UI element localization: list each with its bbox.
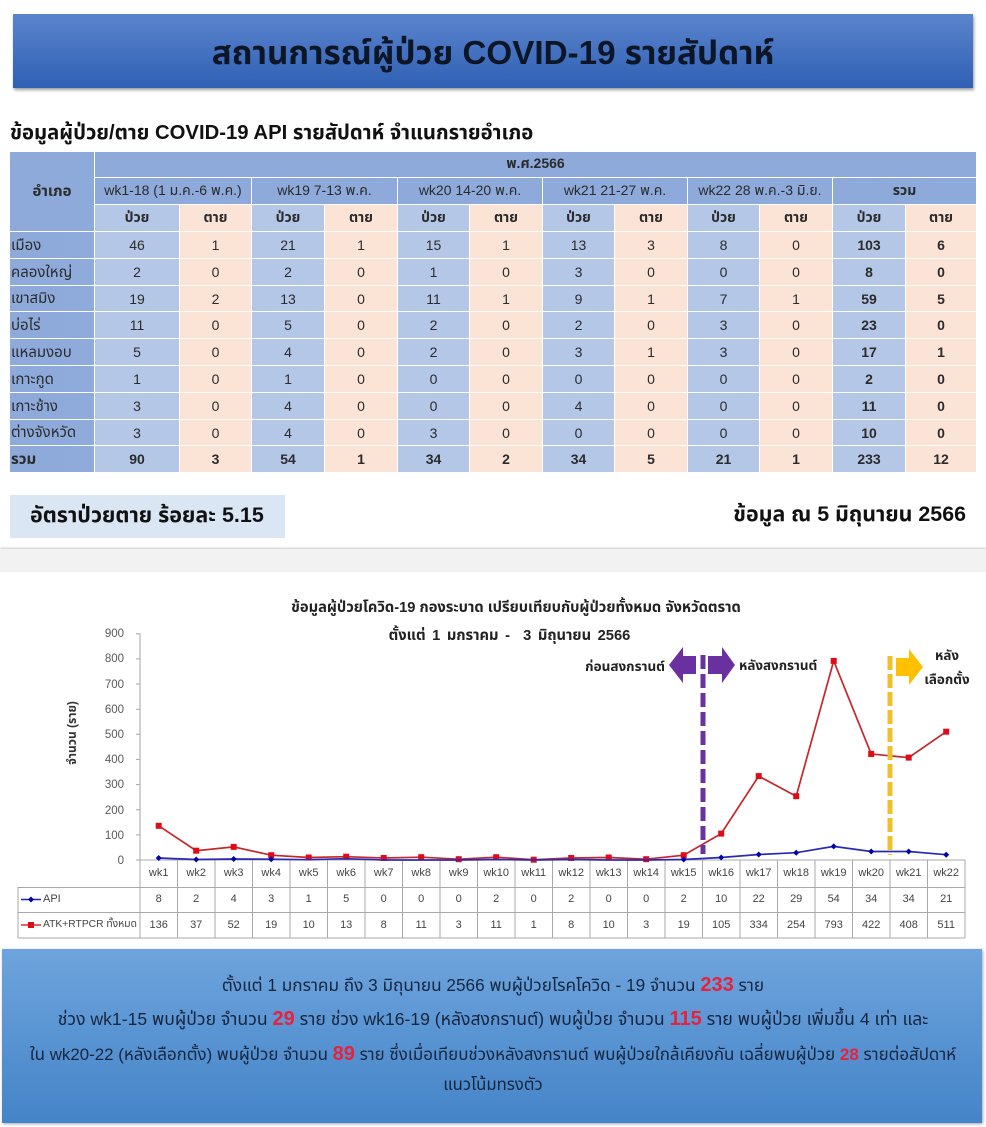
row: Bo Rai: 0 [212, 317, 219, 333]
ATK+RTPCR values row: 3 [456, 919, 462, 931]
row: other provinces: 0 [720, 424, 727, 440]
title banner: สถานการณ์ผู้ป่วย COVID-19 รายสัปดาห์ [212, 35, 774, 72]
API values row: 0 [456, 893, 462, 905]
arrow: after election [896, 649, 923, 685]
row: Khlong Yai: 0 [212, 264, 219, 280]
label: after election [924, 648, 970, 687]
row: Mueang: 21 [280, 237, 296, 253]
label: after election: เลือกตั้ง [924, 670, 970, 687]
API values row: 8 [156, 893, 162, 905]
row: Laem Ngop: 3 [575, 344, 582, 360]
API values row: 0 [381, 893, 387, 905]
chart title [291, 597, 741, 644]
API values row: 2 [493, 893, 499, 905]
y axis: 400 [105, 754, 124, 766]
row: total [10, 446, 976, 472]
row: total: 34 [426, 451, 441, 467]
API values row: 0 [606, 893, 612, 905]
API values row: 10 [715, 893, 727, 905]
blue line: API [156, 843, 949, 862]
row: other provinces: 0 [502, 424, 510, 440]
table header: weeks: wk21 21-27 พ.ค. [564, 182, 666, 198]
row: Khao Saming: 0 [357, 290, 365, 306]
row: Laem Ngop: 2 [430, 344, 437, 360]
row: Khao Saming: 13 [280, 290, 296, 306]
row: Laem Ngop: 0 [357, 344, 365, 360]
row: Ko Chang: 0 [212, 398, 219, 414]
week labels: wk1 [148, 867, 168, 879]
summary line 1: ตั้งแต่ 1 มกราคม ถึง 3 มิถุนายน 2566 พบผู้ป่วยโรคโควิด - 19 จำนวน 233 ราย [222, 974, 764, 996]
row: Mueang: 1 [212, 237, 219, 253]
chart title: ตั้งแต่ 1 มกราคม - 3 มิถุนายน 2566 [389, 625, 630, 644]
week labels: wk2 [185, 867, 206, 879]
ATK+RTPCR values row: 11 [490, 919, 502, 931]
y axis: 0 [118, 855, 124, 867]
API values row: 0 [531, 893, 537, 905]
table header: weeks: wk20 14-20 พ.ค. [419, 182, 521, 198]
table header: sick and dead [95, 205, 976, 231]
row: other provinces: ต่างจังหวัด [11, 424, 76, 441]
row: Ko Chang: 0 [792, 398, 800, 414]
week labels: wk20 [857, 867, 884, 879]
API values row: 29 [790, 893, 802, 905]
week labels [148, 867, 959, 879]
API values row: 2 [193, 893, 199, 905]
week labels: wk17 [745, 867, 772, 879]
y axis: 100 [105, 830, 124, 842]
row: Ko Kut: 0 [720, 371, 727, 387]
row: Mueang: เมือง [11, 236, 41, 254]
row: Ko Kut: 0 [430, 371, 437, 387]
row: total: 5 [647, 451, 655, 467]
week labels: wk9 [448, 867, 468, 879]
week labels: wk18 [782, 867, 809, 879]
ATK+RTPCR values row: 334 [750, 919, 768, 931]
row: Khlong Yai: คลองใหญ่ [11, 264, 72, 280]
title banner [13, 14, 973, 88]
callout: case fatality rate [10, 495, 285, 538]
row: other provinces: 3 [430, 424, 437, 440]
arrow: after Songkran [708, 647, 735, 683]
data date note: ข้อมูล ณ 5 มิถุนายน 2566 [733, 502, 966, 526]
y axis title: จำนวน (ราย) [65, 701, 79, 765]
ATK+RTPCR values row: 13 [340, 919, 352, 931]
y axis: 200 [105, 805, 124, 817]
row: Khlong Yai: 0 [792, 264, 800, 280]
legend: API [21, 893, 61, 905]
row: Khao Saming: 59 [861, 290, 877, 306]
row: Khlong Yai: 0 [937, 264, 945, 280]
y axis: 600 [105, 704, 124, 716]
panel: summary [2, 949, 982, 1123]
week labels: wk6 [335, 867, 356, 879]
row: Bo Rai: 23 [861, 317, 877, 333]
table header: sick and dead: ตาย [929, 208, 953, 224]
purple dashed line: Songkran [700, 655, 706, 854]
row: Bo Rai: 5 [284, 317, 292, 333]
row: Khao Saming [10, 286, 976, 311]
ATK+RTPCR values row: 408 [900, 919, 918, 931]
table header: sick and dead: ป่วย [125, 208, 149, 224]
y axis: 300 [105, 779, 124, 791]
row: Khao Saming: 1 [502, 290, 510, 306]
API values row: 34 [865, 893, 877, 905]
row: Ko Chang: 0 [502, 398, 510, 414]
row: Khao Saming: 1 [647, 290, 655, 306]
row: total: 21 [716, 451, 731, 467]
callout: case fatality rate: อัตราป่วยตาย ร้อยละ 5.15 [30, 503, 264, 527]
row: other provinces: 0 [647, 424, 655, 440]
row: Ko Chang: 0 [647, 398, 655, 414]
API values row: 1 [306, 893, 312, 905]
row: Laem Ngop: 0 [502, 344, 510, 360]
week labels: wk21 [895, 867, 922, 879]
ATK+RTPCR values row: 793 [825, 919, 843, 931]
row: total: 12 [933, 451, 949, 467]
row: Ko Chang: 11 [862, 398, 876, 414]
row: Ko Kut: 0 [357, 371, 365, 387]
row: Bo Rai: 0 [357, 317, 365, 333]
week labels: wk7 [373, 867, 393, 879]
y axis [105, 628, 140, 867]
row: Mueang: 0 [792, 237, 800, 253]
row: other provinces: 0 [792, 424, 800, 440]
row: Ko Chang: 3 [133, 398, 141, 414]
row: other provinces: 0 [575, 424, 582, 440]
table header: weeks: wk22 28 พ.ค.-3 มิ.ย. [698, 182, 822, 198]
row: Laem Ngop [10, 339, 976, 365]
row: Khao Saming: 9 [575, 290, 582, 306]
ATK+RTPCR values row: 8 [568, 919, 574, 931]
row: Mueang: 3 [647, 237, 655, 253]
row: Khlong Yai: 1 [430, 264, 437, 280]
week labels: wk19 [820, 867, 847, 879]
row: Ko Kut: 1 [284, 371, 292, 387]
row: Khao Saming: เขาสมิง [11, 290, 55, 307]
row: Bo Rai: 0 [937, 317, 945, 333]
row: Khlong Yai [10, 259, 976, 285]
week labels: wk5 [298, 867, 318, 879]
row: Ko Kut: 0 [647, 371, 655, 387]
table header: weeks: wk19 7-13 พ.ค. [277, 182, 372, 198]
API values row: 22 [753, 893, 765, 905]
yellow dashed line: election [888, 656, 892, 855]
row: Laem Ngop: 4 [284, 344, 292, 360]
row: Bo Rai: 11 [130, 317, 144, 333]
legend: ATK+RTPCR [21, 917, 137, 930]
row: Ko Kut: เกาะกูด [11, 370, 54, 388]
row: Bo Rai: 2 [575, 317, 582, 333]
row: Mueang: 1 [502, 237, 510, 253]
API values row: 5 [343, 893, 349, 905]
row: total: 90 [129, 451, 145, 467]
row: Ko Chang: 4 [284, 398, 292, 414]
row: Ko Kut: 0 [212, 371, 219, 387]
data table grid [18, 860, 965, 938]
row: Ko Chang: 0 [357, 398, 365, 414]
row: Khlong Yai: 0 [357, 264, 365, 280]
row: Khlong Yai: 0 [502, 264, 510, 280]
row: Khao Saming: 19 [129, 290, 145, 306]
row: Ko Kut: 0 [792, 371, 800, 387]
ATK+RTPCR values row [150, 919, 955, 931]
week labels: wk14 [632, 867, 659, 879]
row: Mueang [10, 232, 976, 258]
row: Bo Rai [10, 312, 976, 338]
row: Laem Ngop: 0 [792, 344, 800, 360]
red line: ATK+RTPCR total [156, 658, 949, 863]
API values row: 54 [828, 893, 840, 905]
table header: sick and dead: ป่วย [711, 208, 736, 224]
API values row: 0 [643, 893, 649, 905]
week labels: wk8 [410, 867, 431, 879]
table header: sick and dead: ป่วย [421, 208, 446, 224]
ATK+RTPCR values row: 37 [190, 919, 202, 931]
row: total: 1 [792, 451, 800, 467]
row: Khlong Yai: 3 [575, 264, 582, 280]
row: Khao Saming: 11 [426, 290, 441, 306]
row: Laem Ngop: แหลมงอบ [11, 344, 72, 360]
week labels: wk15 [670, 867, 697, 879]
ATK+RTPCR values row: 511 [937, 919, 955, 931]
table header: weeks [95, 178, 976, 204]
y axis: 800 [105, 653, 124, 665]
table header: weeks: wk1-18 (1 ม.ค.-6 พ.ค.) [104, 182, 242, 198]
API values row: 3 [268, 893, 274, 905]
summary line 2: ช่วง wk1-15 พบผู้ป่วย จำนวน 29 ราย ช่วง wk16-19 (หลังสงกรานต์) พบผู้ป่วย จำนวน 115 ราย พบผู้ป่วย เพิ่มขึ้น 4 เท่า และ [58, 1008, 928, 1030]
table header: sick and dead: ตาย [204, 208, 227, 224]
legend: API: API [43, 893, 61, 905]
row: Laem Ngop: 5 [133, 344, 141, 360]
row: Ko Chang: เกาะช้าง [11, 398, 58, 414]
row: total: 3 [212, 451, 219, 467]
row: Mueang: 15 [426, 237, 441, 253]
API values row [156, 893, 952, 905]
week labels: wk3 [223, 867, 243, 879]
ATK+RTPCR values row: 19 [265, 919, 277, 931]
row: Mueang: 46 [129, 237, 145, 253]
API values row: 2 [568, 893, 574, 905]
row: Ko Kut: 1 [133, 371, 141, 387]
arrow: before Songkran [669, 647, 696, 683]
row: Laem Ngop: 1 [647, 344, 655, 360]
week labels: wk12 [557, 867, 584, 879]
API values row: 4 [231, 893, 237, 905]
table header: sick and dead: ตาย [494, 208, 518, 224]
row: Ko Kut [10, 366, 976, 392]
table header: weeks: รวม [893, 182, 916, 198]
row: Mueang: 8 [720, 237, 727, 253]
week labels: wk4 [260, 867, 281, 879]
row: other provinces: 3 [133, 424, 141, 440]
row: other provinces: 0 [212, 424, 219, 440]
table header: sick and dead: ป่วย [566, 208, 591, 224]
table header: sick and dead: ป่วย [857, 208, 881, 224]
row: Ko Chang: 0 [937, 398, 945, 414]
ATK+RTPCR values row: 52 [228, 919, 240, 931]
row: Ko Kut: 0 [502, 371, 510, 387]
row: total: 34 [571, 451, 586, 467]
row: Ko Kut: 0 [575, 371, 582, 387]
row: Bo Rai: 2 [430, 317, 437, 333]
ATK+RTPCR values row: 3 [643, 919, 649, 931]
row: total: รวม [11, 450, 36, 468]
week labels: wk10 [482, 867, 509, 879]
table: weekly cases and deaths by district [10, 152, 976, 472]
ATK+RTPCR values row: 136 [150, 919, 168, 931]
row: Khlong Yai: 8 [865, 264, 873, 280]
ATK+RTPCR values row: 11 [415, 919, 427, 931]
row: Khlong Yai: 2 [133, 264, 141, 280]
ATK+RTPCR values row: 10 [603, 919, 615, 931]
row: total: 233 [857, 451, 881, 467]
y axis: 700 [105, 679, 124, 691]
legend: ATK+RTPCR: ATK+RTPCR ทั้งหมด [43, 917, 137, 930]
row: Ko Chang: 0 [720, 398, 727, 414]
ATK+RTPCR values row: 254 [787, 919, 805, 931]
y axis: 900 [105, 628, 124, 640]
row: Laem Ngop: 17 [861, 344, 877, 360]
table heading: ข้อมูลผู้ป่วย/ตาย COVID-19 API รายสัปดาห์ จำแนกรายอำเภอ [10, 122, 533, 144]
row: Khao Saming: 1 [792, 290, 800, 306]
table header: sick and dead: ตาย [784, 208, 808, 224]
row: Bo Rai: 0 [647, 317, 655, 333]
summary line 4: แนวโน้มทรงตัว [443, 1075, 543, 1094]
summary line 3: ใน wk20-22 (หลังเลือกตั้ง) พบผู้ป่วย จำนวน 89 ราย ซึ่งเมื่อเทียบช่วงหลังสงกรานต์ พบผู้ป่วยใกล้เคียงกัน เฉลี่ยพบผู้ป่วย 28 รายต่อสัปดาห์ [30, 1043, 956, 1065]
row: Ko Chang: 0 [430, 398, 437, 414]
row: Khlong Yai: 2 [284, 264, 292, 280]
row: other provinces: 4 [284, 424, 292, 440]
row: Bo Rai: 3 [720, 317, 727, 333]
row: Khao Saming: 5 [937, 290, 945, 306]
row: Mueang: 13 [571, 237, 586, 253]
table header: sick and dead: ตาย [639, 208, 663, 224]
row: Laem Ngop: 3 [720, 344, 727, 360]
table header: year: พ.ศ.2566 [506, 155, 565, 171]
row: Khao Saming: 7 [720, 290, 727, 306]
row: Khlong Yai: 0 [720, 264, 727, 280]
row: Ko Chang [10, 393, 976, 419]
ATK+RTPCR values row: 1 [531, 919, 537, 931]
row: Bo Rai: บ่อไร่ [11, 316, 40, 334]
row: other provinces: 0 [357, 424, 365, 440]
week labels: wk22 [932, 867, 959, 879]
row: total: 54 [280, 451, 296, 467]
label: after election: หลัง [935, 648, 959, 663]
row: other provinces [10, 420, 976, 445]
row: Mueang: 1 [357, 237, 365, 253]
week labels: wk11 [520, 867, 546, 879]
y axis: 500 [105, 729, 124, 741]
table header: year [10, 152, 976, 472]
row: total: 1 [357, 451, 365, 467]
row: Mueang: 103 [857, 237, 881, 253]
label: before Songkran: ก่อนสงกรานต์ [585, 658, 665, 674]
ATK+RTPCR values row: 105 [712, 919, 730, 931]
row: Bo Rai: 0 [792, 317, 800, 333]
ATK+RTPCR values row: 422 [862, 919, 880, 931]
API values row: 21 [940, 893, 952, 905]
row: Laem Ngop: 0 [212, 344, 219, 360]
row: Ko Kut: 2 [865, 371, 873, 387]
row: other provinces: 0 [937, 424, 945, 440]
table header: sick and dead: ป่วย [276, 208, 300, 224]
ATK+RTPCR values row: 10 [303, 919, 315, 931]
row: other provinces: 10 [861, 424, 877, 440]
row: Khao Saming: 2 [212, 290, 219, 306]
row: Ko Kut: 0 [937, 371, 945, 387]
row: Bo Rai: 0 [502, 317, 510, 333]
week labels: wk13 [595, 867, 622, 879]
week labels: wk16 [707, 867, 734, 879]
row: Mueang: 6 [937, 237, 945, 253]
API values row: 0 [418, 893, 424, 905]
chart title: ข้อมูลผู้ป่วยโควิด-19 กองระบาด เปรียบเทียบกับผู้ป่วยทั้งหมด จังหวัดตราด [291, 597, 741, 617]
table header: sick and dead: ตาย [349, 208, 373, 224]
row: Ko Chang: 4 [575, 398, 582, 414]
table header: year: อำเภอ [32, 183, 72, 200]
row: Laem Ngop: 1 [937, 344, 945, 360]
label: after Songkran: หลังสงกรานต์ [739, 658, 817, 673]
separator band [0, 549, 986, 572]
API values row: 2 [681, 893, 687, 905]
row: Khlong Yai: 0 [647, 264, 655, 280]
ATK+RTPCR values row: 8 [381, 919, 387, 931]
API values row: 34 [903, 893, 915, 905]
ATK+RTPCR values row: 19 [678, 919, 690, 931]
row: total: 2 [502, 451, 510, 467]
